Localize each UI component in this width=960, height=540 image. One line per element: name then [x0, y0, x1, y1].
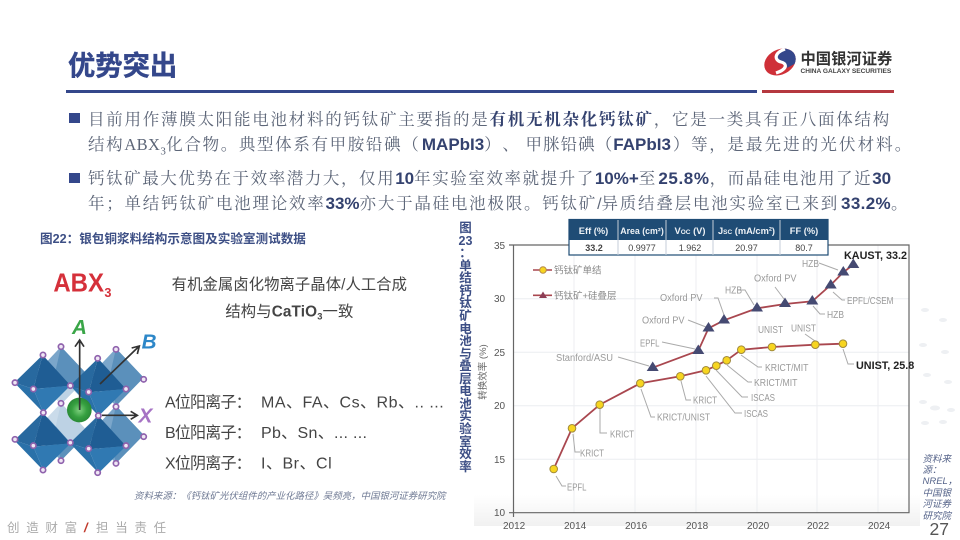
bullet 1 text: 目前用作薄膜太阳能电池材料的钙钛矿主要指的是有机无机杂化钙钛矿，它是一类具有正八面体结构: [88, 106, 891, 130]
figure 23 vertical caption: 叠: [459, 359, 472, 373]
page number: 27: [930, 519, 949, 539]
figure 23 vertical caption: 室: [459, 435, 472, 449]
x axis labels: 2024: [868, 521, 891, 532]
figure 23 vertical caption: 效: [459, 447, 472, 461]
legend: 钙钛矿单结: [554, 264, 602, 276]
figure 23 vertical caption: 钛: [459, 296, 472, 310]
record data table: Eff (%): [579, 226, 608, 236]
record data table: 33.2: [585, 243, 603, 253]
figure 23 vertical caption: 与: [459, 347, 472, 361]
record data table: Area (cm²): [620, 226, 664, 236]
title: 优势突出: [68, 50, 177, 81]
heading: structure line 2: 一致: [323, 304, 353, 321]
crystal illustration: [12, 344, 146, 475]
data labels: tandem: Stanford/ASU: [556, 353, 613, 364]
heading: structure line 2: 结构与CaTiO: [225, 304, 317, 321]
heading: structure line 1: 有机金属卤化物离子晶体/人工合成: [172, 276, 407, 293]
figure 23 vertical caption: 图: [459, 221, 472, 235]
x axis labels: 2018: [686, 521, 709, 532]
bullet 2 text: [88, 165, 909, 214]
data labels: single junction: [567, 324, 816, 494]
y axis labels: [494, 241, 506, 519]
x axis labels: 2020: [747, 521, 770, 532]
text: X-site ions: [165, 455, 332, 473]
data labels: single junction: EPFL: [567, 482, 587, 494]
data labels: tandem: [556, 259, 894, 364]
figure 23 source: 中国银: [922, 488, 951, 499]
figure 23 vertical caption: 层: [459, 372, 472, 386]
x axis labels: 2012: [503, 521, 526, 532]
bullet 2 marker: [69, 173, 80, 183]
footer slogan: left: 创造财富: [7, 521, 84, 535]
arrows to A, B, X: [75, 340, 139, 419]
text: X-site ions: X位阴离子：: [165, 455, 252, 473]
series: perovskite single junction: [550, 340, 847, 473]
header rule: red: [762, 90, 894, 93]
data labels: single junction: UNIST: [758, 325, 783, 336]
data labels: single junction: ISCAS: [751, 393, 775, 404]
data labels: single junction: KRICT/MIT: [765, 363, 808, 374]
logo: China Galaxy Securities: CHINA GALAXY SECURITIES: [800, 68, 891, 74]
logo: China Galaxy Securities: [764, 48, 892, 76]
x axis labels: [503, 521, 891, 532]
bullet 1 marker: [69, 113, 80, 123]
text: B-site ions: Pb、Sn、... ...: [261, 425, 367, 442]
data labels: single junction: KRICT/UNIST: [657, 412, 710, 424]
data labels: tandem: Oxford PV: [642, 316, 685, 326]
bullet 1 text: 结构ABX3化合物。典型体系有甲胺铅碘（MAPbI3）、 甲脒铅碘（FAPbI3）等，是最先进的光伏材料。: [88, 131, 913, 157]
record data table: VOC (V): [675, 226, 705, 236]
text: A-site ions: [165, 393, 444, 411]
figure 23 vertical caption: ：: [459, 246, 472, 260]
figure 22 caption: 图22：银包铜浆料结构示意图及实验室测试数据: [40, 232, 306, 246]
y axis labels: 35: [494, 241, 506, 252]
footer slogan: right: 担当责任: [96, 521, 173, 535]
data labels: tandem: Oxford PV: [754, 274, 797, 284]
data labels: tandem: EPFL: [640, 338, 660, 350]
x axis labels: 2022: [807, 521, 830, 532]
record data table: 0.9977: [628, 243, 656, 253]
header rule: blue: [66, 90, 757, 93]
figure 23 vertical caption: 池: [459, 334, 472, 348]
text: X-site ions: I、Br、Cl: [261, 456, 332, 473]
decorative faint background dots: [919, 308, 955, 425]
text: A-site ions: A位阳离子：: [165, 393, 252, 411]
figure 23 vertical caption: 结: [459, 271, 472, 285]
y axis labels: 25: [494, 348, 506, 359]
bullet 1 text: [88, 106, 913, 157]
figure 23 source: 源：: [922, 465, 942, 476]
figure 23 vertical caption: 电: [459, 322, 472, 336]
figure 23 vertical caption: 实: [459, 409, 472, 423]
logo: China Galaxy Securities: 中国银河证券: [800, 51, 892, 68]
axes frame: [509, 245, 909, 517]
legend: 钙钛矿+硅叠层: [554, 290, 617, 302]
figure 22: ABX3 structure diagram: [12, 268, 444, 476]
figure 23 vertical caption: [458, 221, 472, 474]
data labels: tandem: HZB: [802, 259, 819, 270]
record data table: 1.962: [679, 243, 701, 253]
y axis labels: 20: [494, 401, 506, 412]
data labels: tandem: EPFL/CSEM: [847, 296, 894, 307]
series: perovskite-silicon tandem: [647, 258, 859, 371]
figure 23 source: 研究院: [922, 511, 951, 522]
figure 23 source: [922, 454, 957, 522]
data labels: tandem: HZB: [827, 310, 844, 321]
bullet 2 text: 年；单结钙钛矿电池理论效率33%亦大于晶硅电池极限。钙钛矿/异质结叠层电池实验室已来到33.2%。: [88, 190, 909, 214]
figure 23 vertical caption: 验: [459, 422, 472, 436]
figure 23 source: 资料来: [922, 454, 951, 464]
x axis labels: 2014: [564, 521, 587, 532]
y axis labels: 10: [494, 508, 506, 519]
record data table: JSC (mA/cm²): [718, 226, 775, 236]
figure 23 vertical caption: 池: [459, 397, 472, 411]
data labels: single junction: UNIST: [791, 324, 816, 334]
figure 23 vertical caption: 矿: [459, 309, 472, 323]
figure 23 source: 河证券: [922, 499, 951, 510]
data labels: single junction: KRICT: [693, 396, 717, 406]
label: A: A: [71, 316, 87, 339]
data labels: single junction: KRICT: [610, 430, 634, 440]
label: B: B: [142, 331, 157, 354]
label: X: X: [138, 405, 154, 428]
callout: UNIST 25.8: UNIST, 25.8: [856, 360, 914, 372]
text: B-site ions: B位阳离子：: [165, 424, 252, 442]
text: A-site ions: MA、FA、Cs、Rb、.. ...: [261, 394, 444, 411]
legend: [533, 264, 617, 302]
leader lines: [556, 263, 854, 486]
record data table: [569, 220, 828, 255]
heading: structure line 2: 3: [317, 311, 322, 321]
y axis labels: 15: [494, 455, 506, 466]
figure 22 source: 资料来源：《钙钛矿光伏组件的产业化路径》吴频亮，中国银河证券研究院: [134, 491, 445, 502]
figure 23 vertical caption: 23: [459, 234, 472, 248]
data labels: single junction: KRICT/MIT: [754, 378, 798, 389]
record data table: 20.97: [735, 243, 758, 253]
figure 23 vertical caption: 率: [459, 460, 472, 474]
figure 23 vertical caption: 单: [459, 259, 472, 273]
x axis labels: 2016: [625, 521, 648, 532]
text: B-site ions: [165, 424, 367, 442]
label: ABX3: ABX: [53, 268, 105, 298]
record data table: 80.7: [795, 243, 813, 253]
figure 23 vertical caption: 钙: [459, 284, 472, 298]
figure 23 vertical caption: 电: [459, 384, 472, 398]
y axis title: 转换效率 (%): [477, 344, 489, 400]
data labels: tandem: Oxford PV: [660, 293, 703, 304]
record data table: FF (%): [790, 226, 818, 236]
figure 23 source: NREL，: [922, 476, 957, 487]
data labels: single junction: ISCAS: [744, 409, 768, 420]
footer slogan: slash: /: [84, 520, 88, 535]
callout: KAUST 33.2: KAUST, 33.2: [844, 250, 907, 262]
label: ABX3 subscript: 3: [104, 286, 111, 300]
bullet 2 text: 钙钛矿最大优势在于效率潜力大，仅用10年实验室效率就提升了10%+至25.8%，而晶硅电池用了近30: [88, 165, 891, 189]
chart bottom shading: [474, 495, 920, 526]
grid: [513, 245, 909, 513]
y axis labels: 30: [494, 294, 506, 305]
data labels: tandem: HZB: [725, 286, 742, 296]
data labels: single junction: KRICT: [580, 448, 604, 460]
